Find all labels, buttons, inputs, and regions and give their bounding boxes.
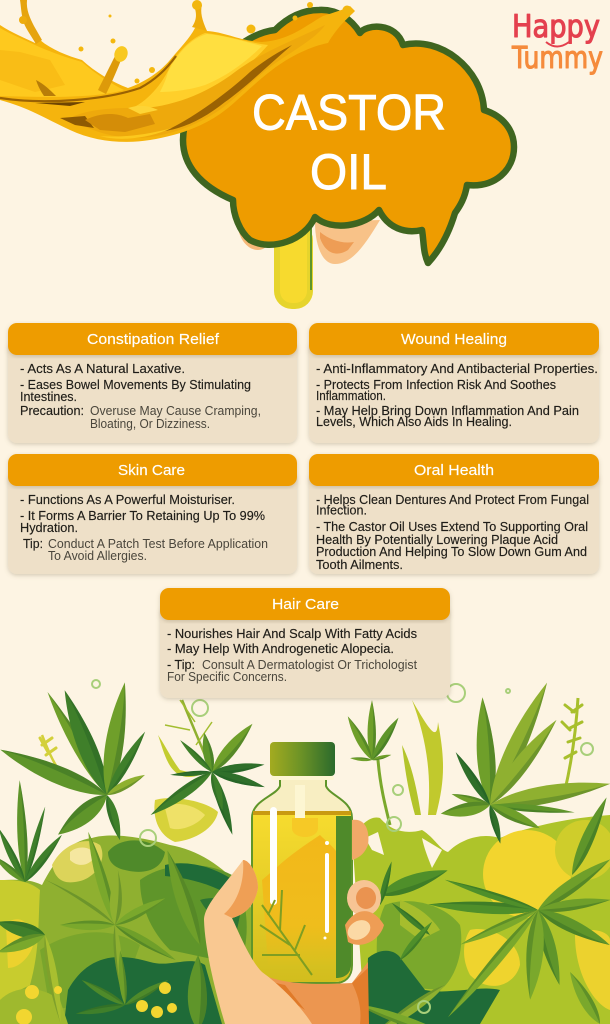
- panel: constipation relief: Bloating, Or Dizziness.: [90, 417, 210, 431]
- panel: oral health: - The Castor Oil Uses Extend To Supporting Oral: [316, 520, 588, 534]
- panel: constipation relief: Intestines.: [20, 390, 77, 404]
- right foliage mass: [352, 815, 610, 1024]
- panel: skin care: Hydration.: [20, 521, 78, 535]
- panel: oral health: - Helps Clean Dentures And Protect From Fungal: [316, 493, 589, 507]
- title: CASTOR: [252, 84, 446, 140]
- panel: oral health: [309, 454, 599, 574]
- leaf cluster: top left: [0, 681, 149, 842]
- panel: hair care: [160, 588, 450, 698]
- panel: constipation relief: Overuse May Cause Cramping,: [90, 404, 261, 418]
- panel: skin care: To Avoid Allergies.: [48, 549, 147, 563]
- bottle: [252, 742, 352, 983]
- header: [8, 323, 297, 355]
- panel: wound healing: Inflammation.: [316, 389, 386, 403]
- left foliage mass: [0, 836, 265, 1024]
- panel: wound healing: Levels, Which Also Aids In Healing.: [316, 415, 512, 429]
- title: OIL: [310, 144, 387, 200]
- illustration: oil splash: [0, 0, 355, 142]
- panel: hair care: - Tip:: [167, 658, 195, 672]
- panel: skin care: Tip:: [23, 537, 43, 551]
- panel: skin care: Skin Care: [118, 462, 185, 479]
- panel: constipation relief: - Eases Bowel Movements By Stimulating: [20, 378, 251, 392]
- hand: [204, 820, 384, 1024]
- yellow flowers left: [16, 982, 177, 1024]
- panel: hair care: Consult A Dermatologist Or Trichologist: [202, 658, 418, 672]
- panel: hair care: Hair Care: [272, 596, 339, 613]
- panel: oral health: Production And Helping To Slow Down Gum And: [316, 545, 587, 559]
- panel: hair care: For Specific Concerns.: [167, 670, 287, 684]
- leaf cluster: small right of bottle: [344, 700, 402, 762]
- panel: skin care: Conduct A Patch Test Before Application: [48, 537, 268, 551]
- panel: wound healing: - May Help Bring Down Inflammation And Pain: [316, 404, 579, 418]
- title: [252, 84, 446, 200]
- logo: Happy Tummy: [511, 9, 603, 76]
- panel: constipation relief: - Acts As A Natural Laxative.: [20, 362, 185, 376]
- panel: wound healing: - Protects From Infection Risk And Soothes: [316, 378, 556, 392]
- panel: wound healing: - Anti-Inflammatory And Antibacterial Properties.: [316, 362, 598, 376]
- leaf cluster: far left: [0, 780, 65, 885]
- header: [309, 323, 599, 355]
- panel: wound healing: Wound Healing: [401, 331, 507, 348]
- leaf cluster: right bottom: [358, 854, 610, 1024]
- illustration: dropper behind title bubble: [238, 220, 380, 309]
- panel: hair care: - May Help With Androgenetic Alopecia.: [167, 642, 394, 656]
- panel: skin care: - It Forms A Barrier To Retaining Up To 99%: [20, 509, 265, 523]
- panel: wound healing: [309, 323, 599, 443]
- leaf cluster: right top: [440, 679, 610, 877]
- panel: oral health: Tooth Ailments.: [316, 558, 403, 572]
- title speech bubble: [183, 10, 514, 263]
- panel: oral health: Oral Health: [414, 462, 494, 479]
- panel: hair care: - Nourishes Hair And Scalp With Fatty Acids: [167, 627, 417, 641]
- panel: oral health: Health By Potentially Lowering Plaque Acid: [316, 533, 558, 547]
- leaf cluster: top centre: [148, 720, 266, 836]
- panel: skin care: - Functions As A Powerful Moisturiser.: [20, 493, 235, 507]
- header: [309, 454, 599, 486]
- reeds and stems: [40, 698, 582, 842]
- header: [8, 454, 297, 486]
- panel: oral health: Infection.: [316, 504, 367, 518]
- header: [160, 588, 450, 620]
- leaf cluster: centre left: [0, 830, 207, 1024]
- panel: constipation relief: Precaution:: [20, 404, 84, 418]
- bubbles: [92, 680, 593, 1013]
- illustration: plants and bottle: [0, 679, 610, 1024]
- logo: Happy Tummy: Happy: [512, 9, 600, 45]
- panel: skin care: [8, 454, 297, 574]
- panel: constipation relief: Constipation Relief: [87, 331, 220, 348]
- panel: constipation relief: [8, 323, 297, 443]
